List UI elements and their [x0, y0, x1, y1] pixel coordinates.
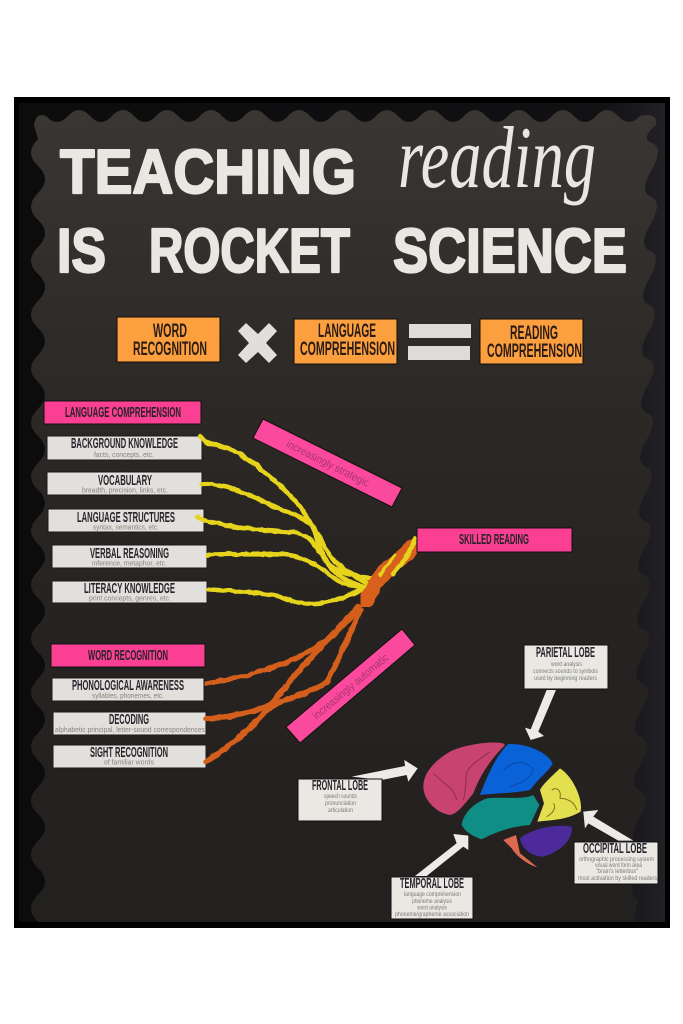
- title: reading: [398, 110, 596, 207]
- strip: sight recognition: [53, 745, 206, 768]
- strip: verbal reasoning: [52, 545, 207, 568]
- heading: language comprehension: LANGUAGE COMPREHENSION: [65, 405, 181, 421]
- orange word recognition strands: [206, 607, 360, 762]
- callout: temporal lobe: language comprehension: [404, 892, 461, 898]
- callout: temporal lobe: [391, 876, 473, 919]
- strip: phonological awareness: [52, 678, 204, 701]
- arrow: parietal: [525, 690, 556, 740]
- frontal lobe: [423, 743, 505, 815]
- callout: temporal lobe: phoneme analysis: [412, 899, 452, 905]
- strip: vocabulary: breadth, precision, links, etc.: [82, 486, 168, 494]
- callout: occipital lobe: most activation by skilled readers: [578, 876, 657, 882]
- box: reading comprehension: READING: [510, 323, 558, 344]
- strip: phonological awareness: PHONOLOGICAL AWARENESS: [72, 678, 184, 694]
- strip: verbal reasoning: VERBAL REASONING: [90, 546, 169, 562]
- callout: frontal lobe: FRONTAL LOBE: [312, 778, 368, 794]
- black paper background: [31, 110, 658, 922]
- panel: word recognition list: [51, 644, 206, 768]
- title: IS: [57, 217, 106, 286]
- callout: temporal lobe: TEMPORAL LOBE: [400, 876, 464, 892]
- brain diagram: [352, 690, 633, 876]
- strip: sight recognition: of familiar words: [104, 758, 154, 766]
- callout: frontal lobe: speech sounds: [324, 794, 357, 800]
- callout: occipital lobe: "brain's letterbox": [596, 869, 638, 875]
- box: reading comprehension: [480, 319, 583, 364]
- heading: language comprehension: [44, 401, 201, 424]
- brain stem: [503, 835, 537, 867]
- box: word recognition: RECOGNITION: [133, 339, 207, 360]
- twisted rope junction: [363, 538, 415, 603]
- title: ROCKET: [149, 217, 350, 286]
- strip: literacy knowledge: [52, 581, 207, 603]
- yellow language comprehension strands: [198, 437, 372, 604]
- box: word recognition: WORD: [153, 321, 187, 342]
- label: skilled reading: SKILLED READING: [459, 532, 529, 548]
- strip: decoding: alphabetic principal, letter-sound correspondences: [55, 725, 205, 734]
- callout: parietal lobe: connects sounds to symbols: [533, 669, 598, 675]
- label: increasingly automatic: increasingly automatic: [311, 652, 392, 722]
- title: TEACHING: [60, 138, 356, 207]
- strip: language structures: LANGUAGE STRUCTURES: [77, 510, 175, 526]
- callout: occipital lobe: orthographic processing system: [579, 857, 654, 863]
- multiply sign: [238, 323, 277, 363]
- equation: [117, 317, 583, 364]
- arrow: frontal: [352, 760, 418, 782]
- callout: frontal lobe: [298, 778, 382, 821]
- arrow: occipital: [583, 810, 633, 841]
- strip: background knowledge: [47, 436, 202, 460]
- label: skilled reading: [417, 528, 572, 552]
- label: increasingly strategic: [253, 419, 402, 507]
- callout: occipital lobe: visual word form area: [595, 863, 643, 869]
- cerebellum: [520, 826, 572, 857]
- callout: parietal lobe: word analysis: [550, 662, 582, 668]
- strip: decoding: DECODING: [109, 712, 149, 728]
- strip: vocabulary: [47, 472, 202, 495]
- box: language comprehension: COMPREHENSION: [300, 339, 395, 360]
- strip: background knowledge: BACKGROUND KNOWLEDGE: [71, 436, 178, 452]
- strip: language structures: [48, 509, 204, 532]
- callout: parietal lobe: [524, 645, 608, 689]
- strip: literacy knowledge: print concepts, genres, etc.: [89, 594, 171, 602]
- strip: literacy knowledge: LITERACY KNOWLEDGE: [84, 581, 175, 597]
- arrow: temporal: [415, 834, 468, 876]
- title: SCIENCE: [393, 217, 627, 286]
- box: word recognition: [117, 317, 220, 362]
- temporal lobe: [462, 795, 539, 839]
- strip: verbal reasoning: inference, metaphor, etc.: [92, 558, 167, 568]
- occipital lobe: [537, 768, 581, 822]
- board frame: [14, 97, 670, 928]
- strip: decoding: [53, 712, 206, 735]
- title: [57, 110, 627, 286]
- panel: language comprehension list: [44, 401, 207, 603]
- reading rope strands: [198, 437, 415, 762]
- strip: language structures: syntax, semantics, etc.: [93, 522, 159, 532]
- strip: background knowledge: facts, concepts, etc.: [94, 450, 154, 459]
- parietal lobe: [480, 744, 553, 795]
- strip: vocabulary: VOCABULARY: [98, 473, 152, 489]
- callout: parietal lobe: PARIETAL LOBE: [536, 645, 595, 661]
- strip: sight recognition: SIGHT RECOGNITION: [90, 745, 168, 761]
- box: reading comprehension: COMPREHENSION: [487, 341, 582, 362]
- label: increasingly strategic: increasingly strategic: [284, 438, 371, 490]
- strip: phonological awareness: syllables, phonemes, etc.: [92, 691, 164, 700]
- box: language comprehension: [294, 319, 397, 364]
- callout: frontal lobe: pronunciation: [325, 801, 356, 807]
- box: language comprehension: LANGUAGE: [318, 321, 376, 342]
- equals sign: [408, 324, 471, 360]
- scalloped border: [19, 103, 665, 922]
- callout: occipital lobe: [574, 841, 658, 884]
- label: increasingly automatic: [286, 629, 415, 743]
- callout: temporal lobe: word analysis: [416, 906, 447, 912]
- heading: word recognition: WORD RECOGNITION: [88, 648, 168, 664]
- callout: frontal lobe: articulation: [328, 808, 353, 814]
- callout: temporal lobe: phoneme/grapheme association: [395, 912, 469, 918]
- heading: word recognition: [51, 644, 205, 667]
- callout: parietal lobe: used by beginning readers: [534, 676, 597, 682]
